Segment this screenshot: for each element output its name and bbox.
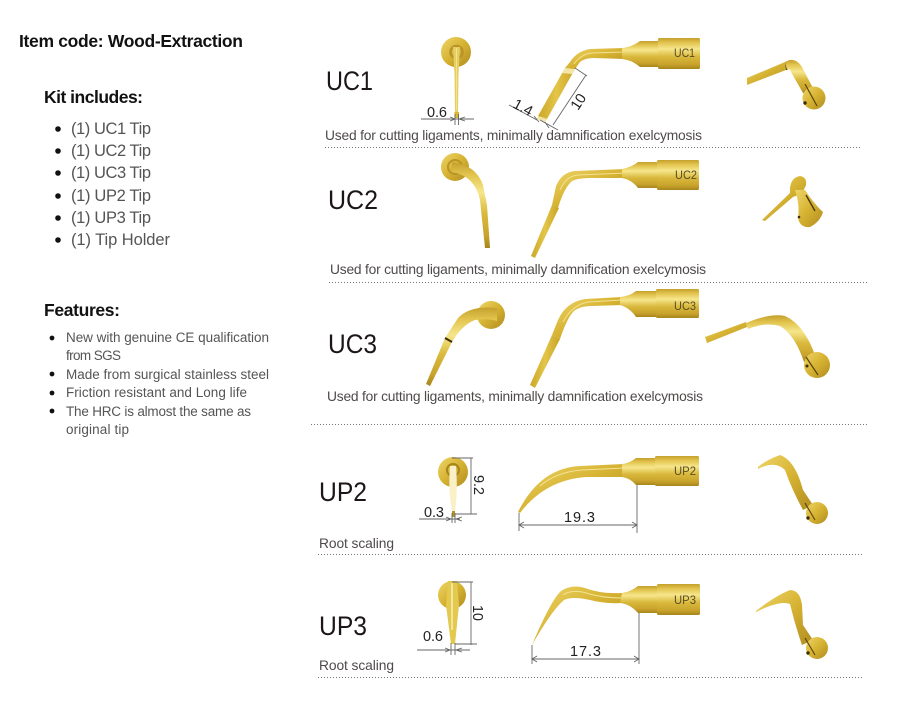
kit list: [55, 120, 171, 249]
UC1 caption: Used for cutting ligaments, minimally damnification exelcymosis: [325, 128, 702, 143]
UP3 front view: 0.6: [423, 629, 443, 645]
panel: UC3 tip: [327, 289, 830, 404]
panel: kit information: [19, 31, 269, 437]
features list: The HRC is almost the same as: [66, 404, 251, 419]
UP2 label: UP2: [319, 477, 367, 507]
UP3 front view: [417, 581, 485, 655]
UC3 side view: UC3: [674, 301, 696, 313]
kit list: (1) UC2 Tip: [71, 142, 151, 160]
UP2 angled view: [758, 455, 828, 524]
UP2 side view: [518, 456, 699, 533]
UP3 caption: Root scaling: [319, 658, 394, 673]
kit list: (1) UP3 Tip: [71, 209, 151, 227]
UC3 caption: Used for cutting ligaments, minimally damnification exelcymosis: [327, 389, 703, 404]
UP3 side view: 17.3: [570, 644, 601, 660]
features list: Made from surgical stainless steel: [66, 367, 269, 382]
kit list: (1) UC3 Tip: [71, 164, 151, 182]
features list: original tip: [66, 422, 129, 437]
UC1 front view: [421, 37, 474, 125]
UC2 front view: [441, 153, 490, 248]
UP2 front view: [419, 457, 486, 523]
panel: UC2 tip: [328, 153, 823, 277]
UP2 caption: Root scaling: [319, 536, 394, 551]
UP2 side view: UP2: [674, 466, 696, 478]
UP3 label: UP3: [319, 611, 367, 641]
UP3 side view: UP3: [674, 595, 696, 607]
UC2 side view: UC2: [675, 170, 697, 182]
UC3 label: UC3: [328, 329, 377, 359]
UP2 front view: 9.2: [470, 475, 486, 495]
UP2 side view: 19.3: [564, 510, 595, 526]
kit includes heading: Kit includes:: [44, 87, 143, 107]
UP3 angled view: [756, 590, 828, 659]
UP3 side view: [532, 584, 700, 664]
features list: Friction resistant and Long life: [66, 385, 247, 400]
UC1 side view: 10: [568, 91, 590, 113]
kit list: (1) UP2 Tip: [71, 187, 151, 205]
UC3 side view: [530, 289, 699, 388]
panel: UP3 tip: [319, 581, 828, 673]
UC1 side view: [509, 38, 700, 130]
UC2 caption: Used for cutting ligaments, minimally damnification exelcymosis: [330, 262, 706, 277]
UC2 side view: [531, 160, 699, 258]
kit list: (1) Tip Holder: [71, 231, 170, 249]
kit list: (1) UC1 Tip: [71, 120, 151, 138]
features heading: Features:: [44, 300, 120, 320]
UC1 front view: 0.6: [427, 105, 447, 121]
features list: [50, 330, 269, 437]
item code heading: Item code: Wood-Extraction: [19, 31, 243, 51]
UP2 front view: 0.3: [424, 505, 444, 521]
UP3 front view: 10: [469, 605, 485, 621]
UC2 angled view: [762, 176, 823, 227]
features list: New with genuine CE qualification: [66, 330, 269, 345]
panel: UC1 tip: [325, 37, 826, 143]
UC1 side view: 1.4: [510, 96, 535, 120]
panel: UP2 tip: [319, 455, 828, 551]
UC2 label: UC2: [328, 185, 378, 215]
UC1 side view: UC1: [674, 48, 695, 60]
features list: from SGS: [66, 348, 121, 363]
UC3 front view: [426, 301, 505, 386]
UC1 angled view: [747, 60, 826, 110]
UC1 label: UC1: [326, 66, 373, 96]
UC3 angled view: [705, 315, 830, 378]
